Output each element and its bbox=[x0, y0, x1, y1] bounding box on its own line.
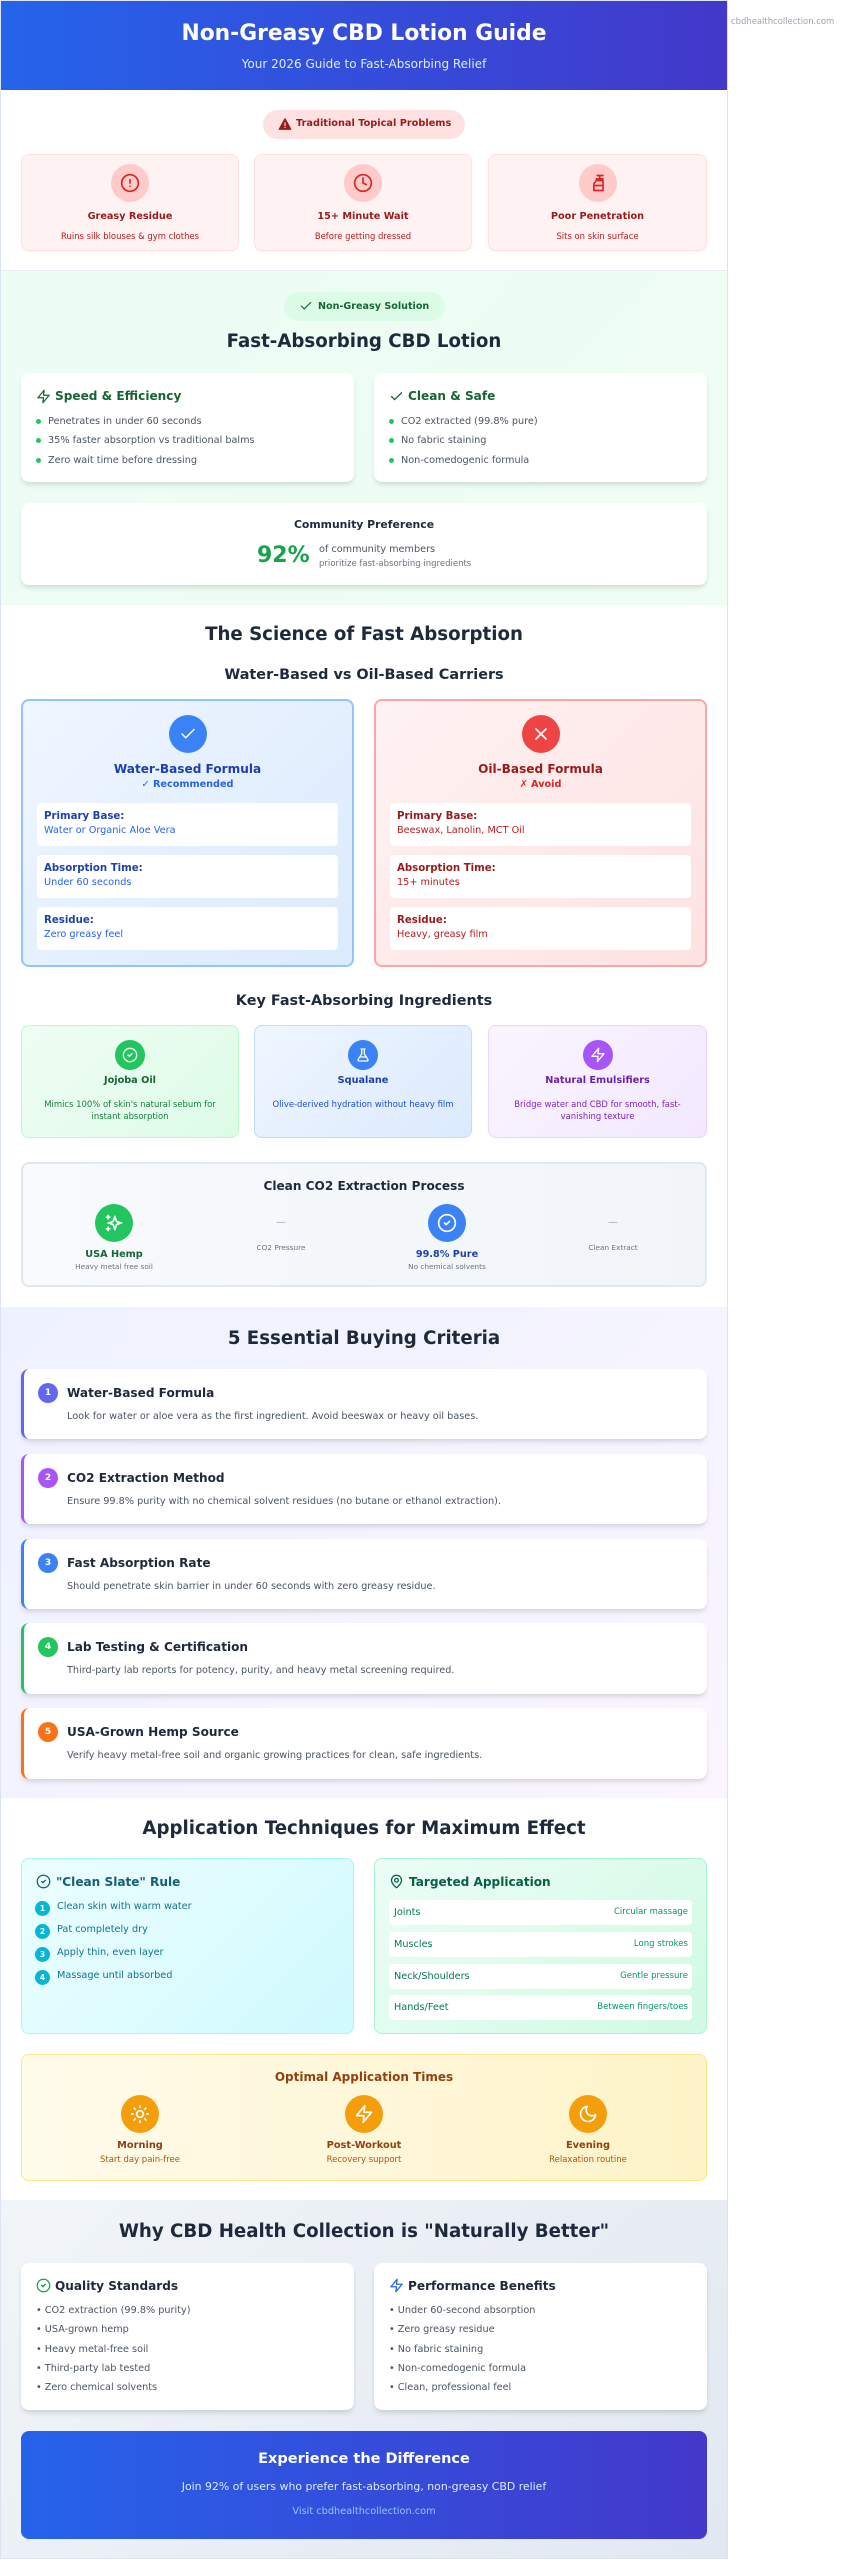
call to action bbox=[21, 2431, 707, 2539]
number bbox=[38, 1553, 58, 1573]
step title: USA Hemp bbox=[85, 1249, 143, 1260]
row: hands and feet: Between fingers/toes bbox=[597, 2002, 688, 2012]
card title: 15+ Minute Wait bbox=[317, 211, 409, 222]
card title: "Clean Slate" Rule bbox=[56, 1875, 180, 1889]
row: residue bbox=[390, 907, 691, 950]
panel: application techniques bbox=[1, 1798, 727, 2200]
source url: cbdhealthcollection.com bbox=[731, 16, 834, 26]
row: primary base bbox=[37, 803, 338, 846]
row: neck and shoulders: Gentle pressure bbox=[620, 1971, 688, 1981]
card: quality standards bbox=[21, 2263, 354, 2410]
icon: check bbox=[300, 302, 312, 310]
number: 1 bbox=[45, 1388, 51, 1398]
card title: Clean & Safe bbox=[408, 389, 495, 403]
subheading: Key Fast-Absorbing Ingredients bbox=[236, 993, 492, 1009]
numbered steps: 4 bbox=[40, 1973, 45, 1982]
row: absorption time: Absorption Time: bbox=[397, 863, 496, 874]
icon: map pin bbox=[390, 1874, 402, 1888]
panel: why cbd health collection bbox=[1, 2200, 727, 2558]
row: hands and feet: Hands/Feet bbox=[394, 2002, 449, 2013]
card text: Sits on skin surface bbox=[556, 231, 639, 241]
list: • Zero chemical solvents bbox=[36, 2382, 157, 2393]
step text: Clean Extract bbox=[588, 1243, 638, 1252]
card: squalane bbox=[254, 1025, 472, 1138]
step title: 99.8% Pure bbox=[416, 1249, 478, 1260]
card title: Water-Based Formula bbox=[114, 762, 261, 776]
row: muscles bbox=[389, 1932, 692, 1957]
time text: Recovery support bbox=[327, 2155, 401, 2165]
card text: Mimics 100% of skin's natural sebum for instant absorption bbox=[44, 1099, 216, 1121]
list: • USA-grown hemp bbox=[36, 2324, 129, 2335]
step text: No chemical solvents bbox=[408, 1262, 486, 1271]
icon: warning triangle bbox=[278, 118, 292, 130]
numbered steps: 3 bbox=[40, 1950, 45, 1959]
row: primary base bbox=[390, 803, 691, 846]
number: 5 bbox=[45, 1727, 51, 1737]
card: community preference bbox=[21, 503, 707, 585]
time: post-workout bbox=[327, 2095, 402, 2165]
criterion text: Look for water or aloe vera as the first ingredient. Avoid beeswax or heavy oil bases. bbox=[67, 1411, 478, 1422]
number bbox=[38, 1722, 58, 1742]
card text: Ruins silk blouses & gym clothes bbox=[61, 231, 199, 241]
card: oil-based formula bbox=[374, 699, 707, 967]
card title: Performance Benefits bbox=[408, 2279, 556, 2293]
icon: bolt bbox=[37, 390, 50, 404]
row: absorption time: Absorption Time: bbox=[44, 863, 143, 874]
card title: Speed & Efficiency bbox=[55, 389, 181, 403]
subheading: Water-Based vs Oil-Based Carriers bbox=[224, 667, 504, 683]
numbered steps: Apply thin, even layer bbox=[57, 1947, 164, 1958]
row: primary base: Primary Base: bbox=[397, 811, 477, 822]
criterion 3 bbox=[21, 1539, 707, 1609]
row: primary base: Primary Base: bbox=[44, 811, 124, 822]
dash: — bbox=[276, 1217, 286, 1228]
card title: Targeted Application bbox=[409, 1875, 551, 1889]
verdict: ✗ Avoid bbox=[520, 779, 561, 790]
icon: check bbox=[390, 392, 402, 400]
icon: sun bbox=[121, 2095, 159, 2133]
criterion 4 bbox=[21, 1623, 707, 1694]
row: primary base: Beeswax, Lanolin, MCT Oil bbox=[397, 825, 525, 836]
list: • Non-comedogenic formula bbox=[389, 2363, 526, 2374]
dash: — bbox=[608, 1217, 618, 1228]
criterion 5 bbox=[21, 1708, 707, 1779]
bullet list: No fabric staining bbox=[401, 435, 486, 446]
statistic: 92% bbox=[257, 543, 310, 568]
row: hands and feet bbox=[389, 1995, 692, 2020]
card text: Olive-derived hydration without heavy film bbox=[272, 1099, 453, 1109]
icon: check circle bbox=[428, 1204, 466, 1242]
bullet list: 35% faster absorption vs traditional balms bbox=[48, 435, 255, 446]
row: muscles: Muscles bbox=[394, 1939, 433, 1950]
step text: Heavy metal free soil bbox=[75, 1262, 153, 1271]
cta text: Join 92% of users who prefer fast-absorbing, non-greasy CBD relief bbox=[182, 2480, 546, 2493]
badge label: Non-Greasy Solution bbox=[318, 301, 429, 312]
criterion text: Verify heavy metal-free soil and organic growing practices for clean, safe ingredients. bbox=[67, 1750, 482, 1761]
criterion title: CO2 Extraction Method bbox=[67, 1471, 225, 1485]
criterion text: Ensure 99.8% purity with no chemical solvent residues (no butane or ethanol extraction). bbox=[67, 1496, 501, 1507]
row: muscles: Long strokes bbox=[634, 1939, 688, 1949]
card: minute wait bbox=[254, 154, 472, 251]
panel: optimal application times bbox=[21, 2054, 707, 2181]
heading: 5 Essential Buying Criteria bbox=[228, 1328, 500, 1349]
step text: CO2 Pressure bbox=[257, 1243, 305, 1252]
list: • Under 60-second absorption bbox=[389, 2305, 535, 2316]
row: residue: Residue: bbox=[44, 915, 94, 926]
step: usa hemp bbox=[75, 1204, 153, 1271]
number: 4 bbox=[45, 1642, 51, 1652]
card: performance benefits bbox=[374, 2263, 707, 2410]
numbered steps: 2 bbox=[40, 1927, 45, 1936]
icon: clock bbox=[344, 164, 382, 202]
card title: Squalane bbox=[338, 1075, 388, 1086]
bullet list: Non-comedogenic formula bbox=[401, 455, 529, 466]
list bbox=[36, 2305, 191, 2393]
icon: cross bbox=[522, 715, 560, 753]
list: • Zero greasy residue bbox=[389, 2324, 495, 2335]
card title: Natural Emulsifiers bbox=[545, 1075, 650, 1086]
subtitle: Your 2026 Guide to Fast-Absorbing Relief bbox=[242, 57, 486, 71]
icon: sparkles bbox=[95, 1204, 133, 1242]
icon: bolt bbox=[582, 1040, 612, 1070]
cta title: Experience the Difference bbox=[258, 2451, 470, 2467]
numbered steps bbox=[35, 1901, 192, 1985]
row: absorption time: 15+ minutes bbox=[397, 877, 460, 888]
numbered steps: Massage until absorbed bbox=[57, 1970, 172, 1981]
bullet list: Zero wait time before dressing bbox=[48, 455, 197, 466]
number: 2 bbox=[45, 1473, 51, 1483]
icon: alert circle bbox=[111, 164, 149, 202]
row: residue bbox=[37, 907, 338, 950]
step: co2 pressure bbox=[256, 1217, 306, 1252]
row: neck and shoulders: Neck/Shoulders bbox=[394, 1971, 470, 1982]
problems badge bbox=[263, 110, 465, 139]
bullet list: CO2 extracted (99.8% pure) bbox=[401, 416, 538, 427]
card text: Before getting dressed bbox=[315, 231, 411, 241]
card title: Jojoba Oil bbox=[104, 1075, 156, 1086]
statistic label: of community members bbox=[319, 544, 435, 555]
row: joints bbox=[389, 1900, 692, 1925]
criterion 1 bbox=[21, 1369, 707, 1439]
list: • Heavy metal-free soil bbox=[36, 2344, 148, 2355]
bullet list bbox=[36, 416, 255, 466]
icon: check circle bbox=[36, 1874, 50, 1888]
panel title: Clean CO2 Extraction Process bbox=[263, 1179, 465, 1193]
time title: Evening bbox=[566, 2140, 610, 2151]
number bbox=[38, 1468, 58, 1488]
card: greasy residue bbox=[21, 154, 239, 251]
criterion 2 bbox=[21, 1454, 707, 1524]
card title: Greasy Residue bbox=[88, 211, 172, 222]
icon: check circle bbox=[115, 1040, 145, 1070]
row: primary base: Water or Organic Aloe Vera bbox=[44, 825, 176, 836]
criterion text: Should penetrate skin barrier in under 60 seconds with zero greasy residue. bbox=[67, 1581, 436, 1592]
card: targeted application bbox=[374, 1858, 707, 2034]
number bbox=[38, 1637, 58, 1657]
card: poor penetration bbox=[488, 154, 707, 251]
criterion title: Water-Based Formula bbox=[67, 1386, 214, 1400]
step: purity bbox=[408, 1204, 486, 1271]
card: speed and efficiency bbox=[21, 373, 354, 482]
icon: flask bbox=[348, 1040, 378, 1070]
row: joints: Joints bbox=[394, 1907, 420, 1918]
numbered steps: Pat completely dry bbox=[57, 1924, 148, 1935]
criterion text: Third-party lab reports for potency, purity, and heavy metal screening required. bbox=[67, 1665, 454, 1676]
title: Non-Greasy CBD Lotion Guide bbox=[181, 21, 547, 46]
number bbox=[38, 1383, 58, 1403]
criterion title: Lab Testing & Certification bbox=[67, 1640, 248, 1654]
card text: Bridge water and CBD for smooth, fast-vanishing texture bbox=[514, 1099, 681, 1121]
icon: bolt bbox=[345, 2095, 383, 2133]
numbered steps: 1 bbox=[40, 1904, 45, 1913]
time text: Relaxation routine bbox=[549, 2155, 627, 2165]
card title: Poor Penetration bbox=[551, 211, 644, 222]
heading: Application Techniques for Maximum Effect bbox=[142, 1818, 586, 1839]
bullet list bbox=[389, 416, 538, 466]
card title: Community Preference bbox=[294, 518, 434, 531]
bullet list: Penetrates in under 60 seconds bbox=[48, 416, 202, 427]
list bbox=[389, 2305, 535, 2393]
number: 3 bbox=[45, 1558, 51, 1568]
row: residue: Zero greasy feel bbox=[44, 929, 123, 940]
solution badge bbox=[284, 292, 445, 321]
icon: bottle bbox=[578, 164, 616, 202]
card title: Quality Standards bbox=[55, 2279, 178, 2293]
verdict: ✓ Recommended bbox=[141, 779, 234, 790]
criterion title: USA-Grown Hemp Source bbox=[67, 1725, 239, 1739]
card: natural emulsifiers bbox=[488, 1025, 707, 1138]
badge label: Traditional Topical Problems bbox=[296, 118, 451, 129]
panel: traditional topical problems bbox=[1, 90, 727, 271]
panel: non-greasy solution bbox=[1, 271, 727, 605]
icon: bolt bbox=[390, 2278, 403, 2292]
row: neck and shoulders bbox=[389, 1964, 692, 1989]
list: • CO2 extraction (99.8% purity) bbox=[36, 2305, 191, 2316]
card title: Oil-Based Formula bbox=[478, 762, 603, 776]
icon: moon bbox=[569, 2095, 607, 2133]
card: clean and safe bbox=[374, 373, 707, 482]
time title: Post-Workout bbox=[327, 2140, 401, 2151]
time: morning bbox=[100, 2095, 180, 2165]
card: jojoba oil bbox=[21, 1025, 239, 1138]
icon: check circle bbox=[36, 2278, 50, 2292]
numbered steps: Clean skin with warm water bbox=[57, 1901, 192, 1912]
criterion title: Fast Absorption Rate bbox=[67, 1556, 211, 1570]
card: water-based formula bbox=[21, 699, 354, 967]
row: absorption time: Under 60 seconds bbox=[44, 877, 131, 888]
row: absorption time bbox=[390, 855, 691, 898]
row: absorption time bbox=[37, 855, 338, 898]
row: residue: Heavy, greasy film bbox=[397, 929, 488, 940]
heading: The Science of Fast Absorption bbox=[205, 624, 523, 645]
panel: the science of fast absorption bbox=[1, 605, 727, 1307]
panel title: Optimal Application Times bbox=[275, 2070, 453, 2084]
panel: clean co2 extraction process bbox=[21, 1162, 707, 1287]
row: joints: Circular massage bbox=[614, 1907, 688, 1917]
time text: Start day pain-free bbox=[100, 2155, 180, 2165]
list: • No fabric staining bbox=[389, 2344, 483, 2355]
time title: Morning bbox=[117, 2140, 163, 2151]
header banner bbox=[1, 1, 727, 90]
heading: Why CBD Health Collection is "Naturally Better" bbox=[119, 2221, 609, 2242]
card: clean slate rule bbox=[21, 1858, 354, 2034]
statistic note: prioritize fast-absorbing ingredients bbox=[319, 559, 471, 569]
cta link: Visit cbdhealthcollection.com bbox=[292, 2506, 436, 2517]
icon: check bbox=[168, 715, 206, 753]
heading: Fast-Absorbing CBD Lotion bbox=[227, 331, 501, 352]
list: • Clean, professional feel bbox=[389, 2382, 511, 2393]
panel: 5 essential buying criteria bbox=[1, 1307, 727, 1798]
time: evening bbox=[549, 2095, 627, 2165]
list: • Third-party lab tested bbox=[36, 2363, 150, 2374]
step: clean extract bbox=[588, 1217, 638, 1252]
row: residue: Residue: bbox=[397, 915, 447, 926]
